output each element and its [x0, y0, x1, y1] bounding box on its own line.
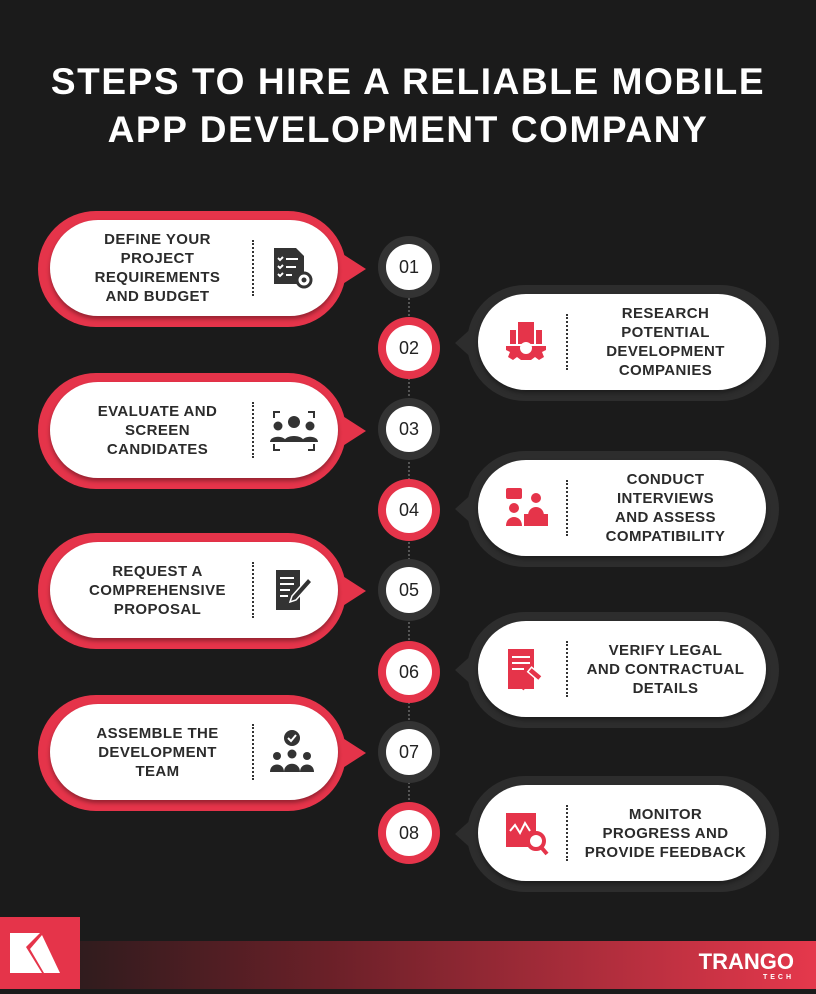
circle 08: 08 [399, 822, 419, 842]
step 6: AND CONTRACTUAL [587, 660, 744, 678]
step 5: COMPREHENSIVE [89, 582, 226, 598]
brand logo text: TECH [763, 974, 794, 981]
step 3 [38, 373, 366, 489]
step 6: VERIFY LEGAL [609, 642, 722, 658]
step 4: AND ASSESS [615, 509, 716, 526]
step 8: PROVIDE FEEDBACK [585, 844, 746, 860]
step 7: ASSEMBLE THE [96, 724, 219, 742]
circle 06: 06 [399, 662, 419, 682]
icon: document pen [276, 570, 311, 610]
step 8: PROGRESS AND [603, 824, 728, 842]
circle 04 [378, 479, 440, 541]
circle 01: 01 [399, 256, 419, 276]
icon: checklist [274, 248, 312, 288]
brand logo text: TRANGO [699, 949, 794, 974]
icon: interview [506, 488, 548, 526]
circle 03 [378, 398, 440, 460]
circle 01 [378, 236, 440, 298]
step 4 [456, 451, 779, 567]
step 2: POTENTIAL [621, 324, 710, 341]
step 1: AND BUDGET [106, 288, 210, 305]
title [51, 61, 765, 150]
step 5: REQUEST A [112, 562, 203, 580]
icon: buildings gear [506, 322, 546, 360]
step 7 [38, 695, 366, 811]
step 7: DEVELOPMENT [98, 744, 217, 760]
step 8 [456, 776, 779, 892]
circle 04: 04 [399, 500, 419, 520]
step 3: CANDIDATES [107, 440, 208, 458]
step 5 [38, 533, 366, 649]
icon: legal document [508, 649, 542, 690]
step 4: COMPATIBILITY [606, 528, 725, 545]
circle 03: 03 [399, 418, 419, 438]
circle 05: 05 [399, 580, 419, 600]
step 6 [456, 612, 779, 728]
step 7: TEAM [135, 762, 180, 780]
title: STEPS TO HIRE A RELIABLE MOBILE [51, 61, 765, 102]
footer bar [0, 941, 816, 989]
step 5: PROPOSAL [114, 600, 201, 618]
icon: team gear [270, 730, 314, 772]
step 8: MONITOR [629, 806, 702, 822]
icon: monitor magnifier [506, 813, 548, 856]
step 3: SCREEN [125, 422, 190, 438]
circle 05 [378, 559, 440, 621]
step 2: RESEARCH [622, 305, 709, 322]
circle 07 [378, 721, 440, 783]
step 2 [456, 285, 779, 401]
step 1: PROJECT [121, 250, 194, 267]
circle 06 [378, 641, 440, 703]
circle 08 [378, 802, 440, 864]
step 1 [38, 211, 366, 327]
circle 07: 07 [399, 742, 419, 762]
step 4: CONDUCT [627, 471, 704, 488]
step 1: DEFINE YOUR [104, 231, 211, 248]
title: APP DEVELOPMENT COMPANY [108, 109, 708, 150]
timeline dotted line [408, 270, 410, 840]
step 3: EVALUATE AND [98, 402, 217, 420]
logo square [0, 917, 80, 989]
step 2: COMPANIES [619, 362, 712, 379]
step 2: DEVELOPMENT [606, 343, 725, 360]
circle 02: 02 [399, 338, 419, 358]
step 1: REQUIREMENTS [95, 269, 220, 286]
circle 02 [378, 317, 440, 379]
step 6: DETAILS [633, 680, 698, 696]
step 4: INTERVIEWS [617, 490, 714, 507]
icon: people [270, 411, 318, 451]
